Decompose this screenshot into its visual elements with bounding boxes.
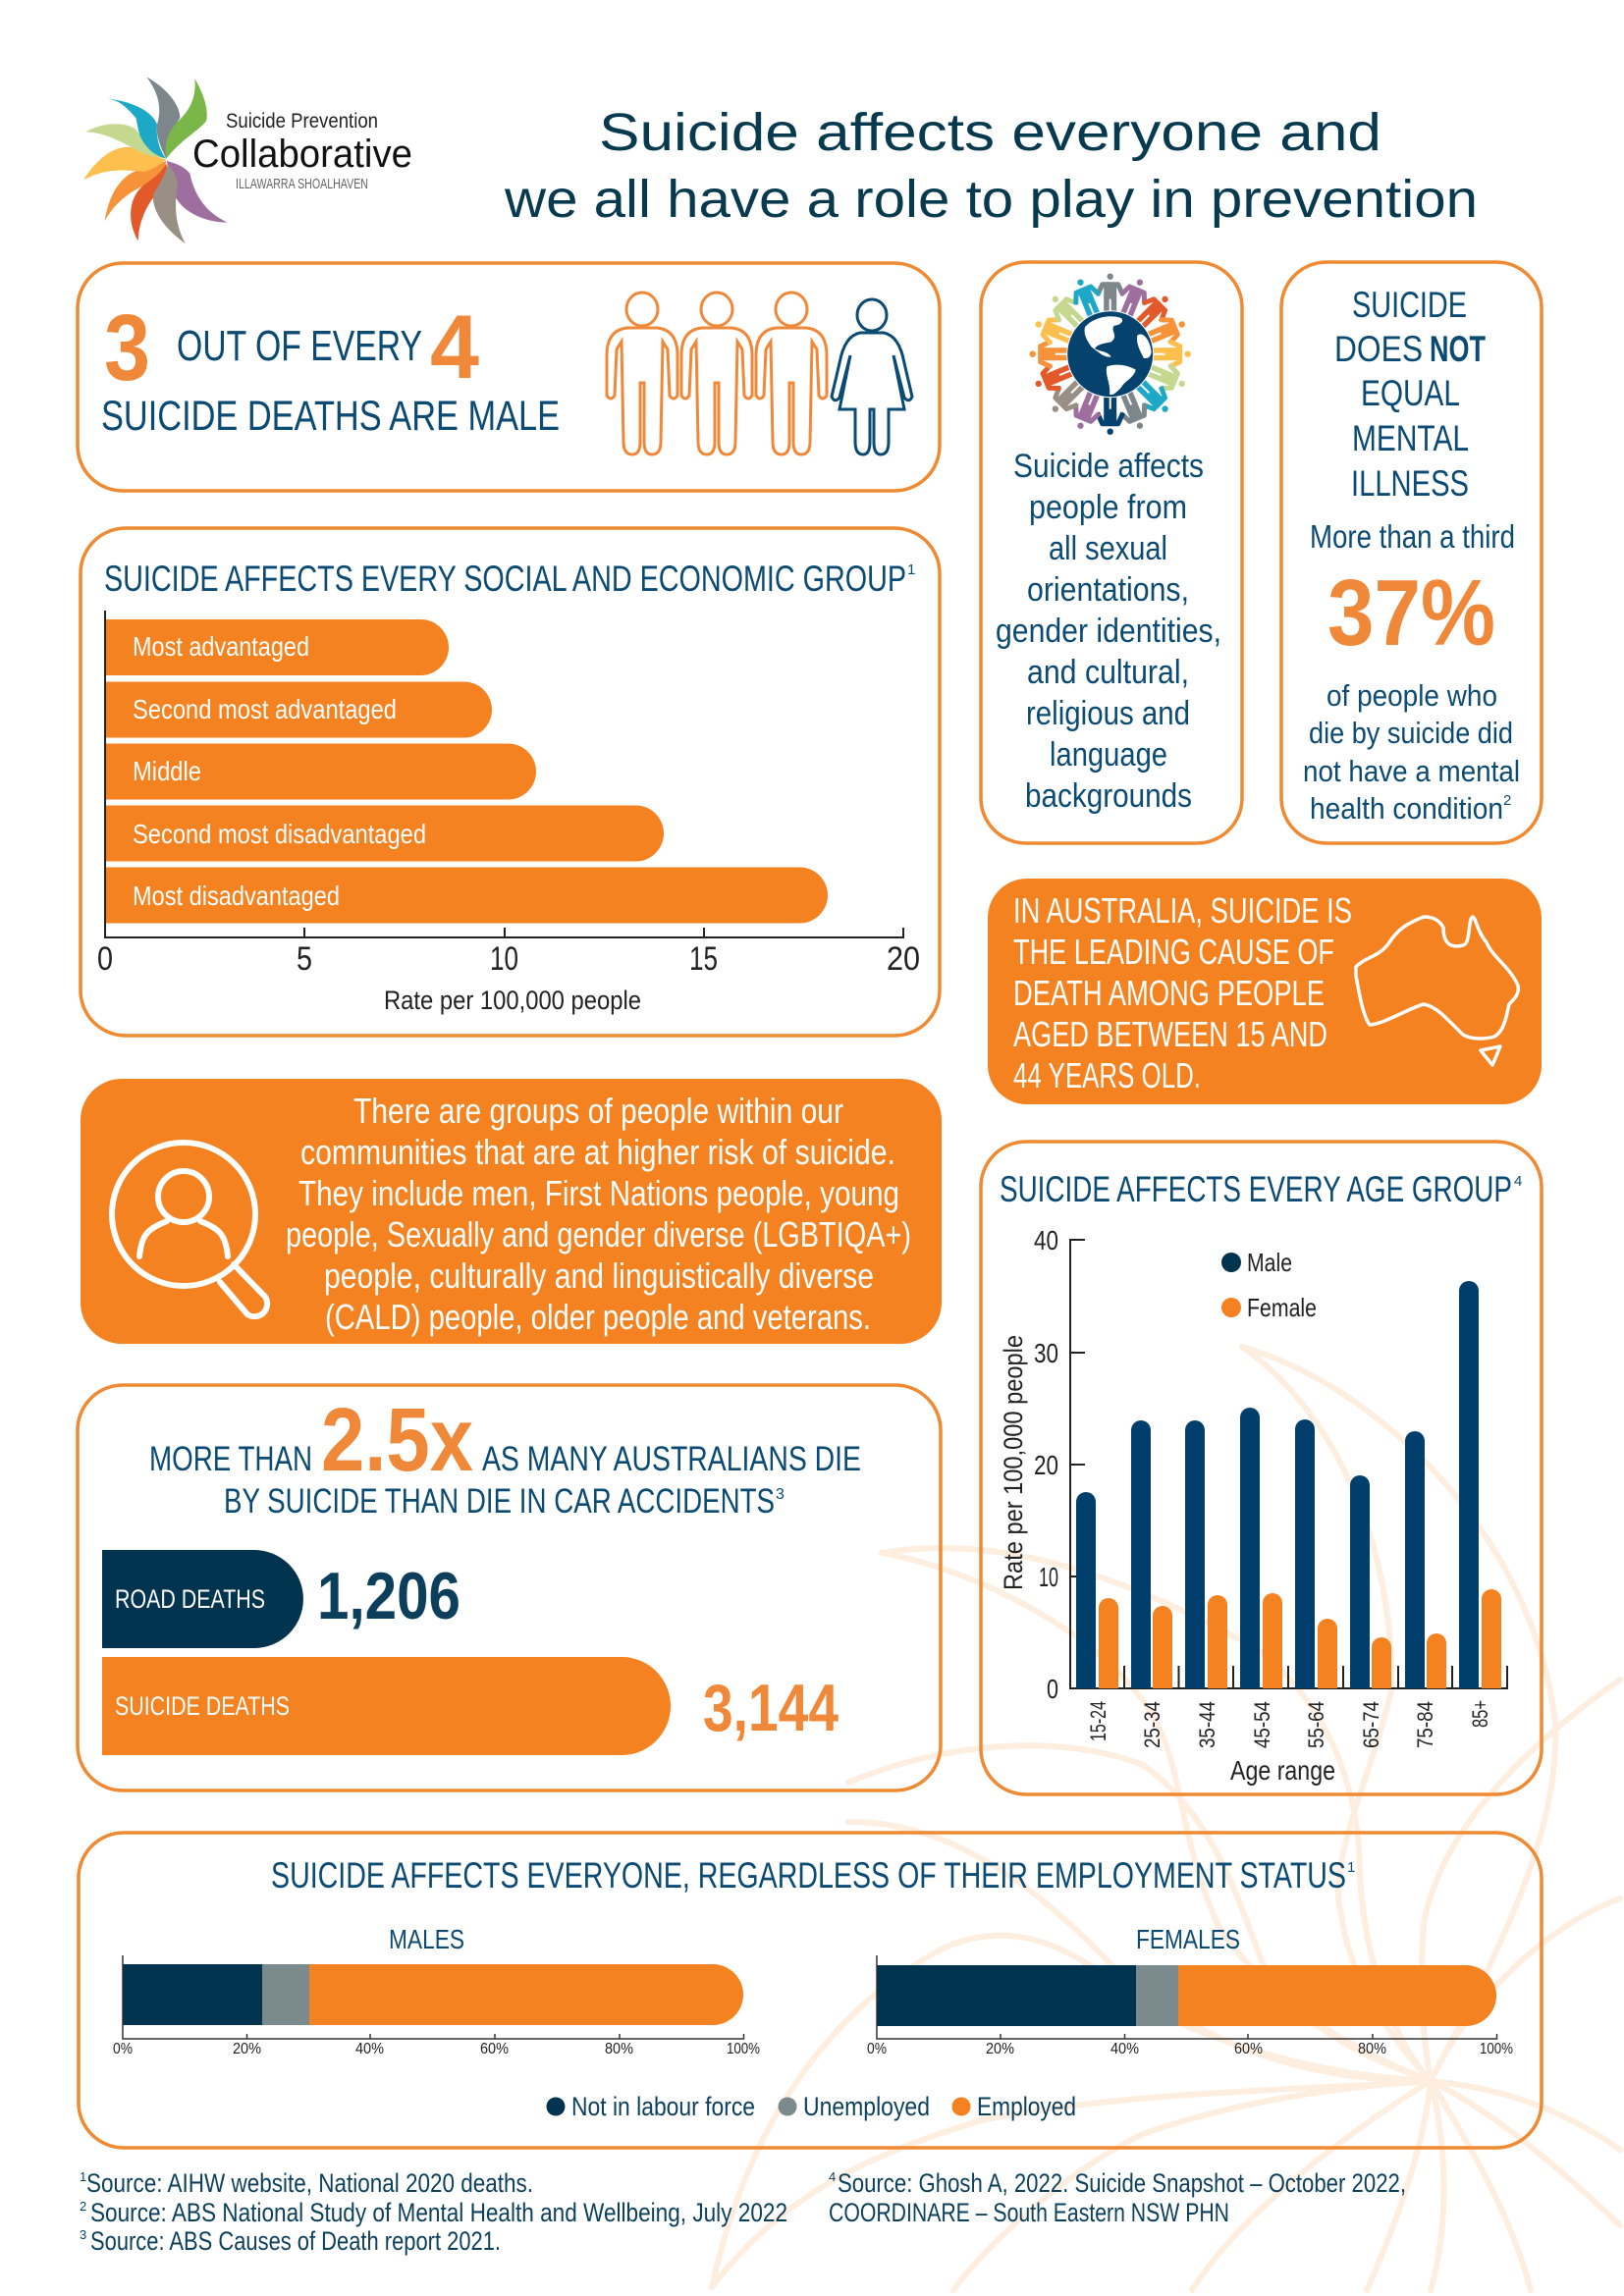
stat heading: OUT OF EVERY [177,322,422,370]
bar: second most disadvantaged: Second most disadvantaged [133,819,426,849]
chart legend: Male [1247,1248,1292,1277]
chart: females: 0% [867,2041,887,2057]
communities text: backgrounds [1025,777,1192,815]
footnotes: Source: Ghosh A, 2022. Suicide Snapshot – October 2022, [838,2168,1406,2198]
chart legend [1221,1248,1317,1322]
logo [83,77,412,243]
chart axes: Rate per 100,000 people [999,1335,1028,1590]
risk groups text [286,1091,911,1337]
panel: socio-economic group bar chart [81,528,940,1036]
icon: map of Australia [1356,917,1518,1065]
chart axis: 10 [490,940,518,978]
chart axes: 0 [1047,1674,1058,1704]
chart legend [546,2092,1076,2121]
footnotes: 2 [80,2199,86,2214]
leading cause text: 44 YEARS OLD. [1013,1055,1201,1095]
bar: second most advantaged [105,681,492,738]
panel heading: DOES [1334,329,1423,369]
stat: 37 percent: 37% [1327,561,1495,666]
leading cause text: DEATH AMONG PEOPLE [1013,973,1325,1013]
chart axes: 55-64 [1304,1701,1328,1748]
leading cause text: AGED BETWEEN 15 AND [1013,1014,1327,1054]
footnotes: 4 [829,2169,836,2184]
bar: middle: Middle [133,756,201,786]
chart axes: 65-74 [1359,1701,1383,1748]
comparison heading: AS MANY AUSTRALIANS DIE [482,1440,861,1478]
communities text: all sexual [1049,530,1167,567]
panel heading: MENTAL [1352,418,1469,458]
chart axes [999,1225,1507,1786]
chart axes: 85+ [1468,1700,1492,1728]
stat: 37 percent [1303,518,1520,826]
footnotes: COORDINARE – South Eastern NSW PHN [829,2198,1229,2227]
title [504,103,1478,229]
risk groups text: communities that are at higher risk of suicide. [300,1132,895,1172]
chart axis: 5 [297,940,312,978]
leading cause text: THE LEADING CAUSE OF [1013,932,1334,972]
communities text: people from [1029,489,1187,526]
chart legend: Unemployed [803,2092,930,2121]
chart axis [97,611,920,1015]
communities text: language [1050,736,1167,774]
logo text: Suicide Prevention [226,110,378,133]
chart legend: Not in labour force [571,2092,755,2121]
male bars [1076,1281,1479,1688]
chart axes: 35-44 [1195,1701,1219,1748]
chart axes: 40 [1034,1225,1058,1255]
panel heading: SUICIDE [1352,285,1467,325]
bar: second most advantaged: Second most advantaged [133,694,397,724]
logo text [192,110,412,192]
footnotes: 3 [80,2227,86,2242]
chart: males: 80% [605,2041,633,2057]
panel heading [1334,285,1486,504]
bar: most disadvantaged: Most disadvantaged [133,881,340,911]
female bars [1099,1589,1501,1688]
panel: road vs suicide deaths [78,1385,941,1790]
panel heading: 1 [1347,1859,1355,1876]
footnotes: Source: AIHW website, National 2020 deaths. [86,2168,533,2198]
panel heading: SUICIDE AFFECTS EVERYONE, REGARDLESS OF THEIR EMPLOYMENT STATUS [271,1855,1346,1896]
chart axes: Age range [1230,1755,1335,1786]
chart: males: MALES [389,1924,464,1954]
communities text: Suicide affects [1013,448,1204,485]
stat heading [101,295,560,440]
panel: higher risk groups [81,1079,942,1344]
title: Suicide affects everyone and [599,103,1381,162]
bar: most advantaged [105,619,449,675]
bar: most disadvantaged [105,868,828,923]
bar: suicide deaths: SUICIDE DEATHS [115,1691,290,1721]
panel heading: EQUAL [1361,373,1460,413]
comparison heading: 3 [776,1486,785,1503]
panel: age group chart [981,1142,1542,1794]
chart: males: 0% [113,2041,133,2057]
chart: females [867,1924,1513,2057]
chart axis: 15 [689,940,718,978]
chart heading: 4 [1514,1173,1522,1190]
communities text: religious and [1026,695,1190,732]
comparison heading [149,1390,861,1521]
icon: female figure [832,299,912,454]
chart: males: 100% [727,2041,760,2057]
chart heading: SUICIDE AFFECTS EVERY SOCIAL AND ECONOMIC GROUP [104,559,906,599]
stat: 37 percent: die by suicide did [1309,716,1513,750]
panel: suicide does not equal mental illness [1281,262,1542,843]
stat: 37 percent: health condition [1310,791,1503,826]
comparison heading: BY SUICIDE THAN DIE IN CAR ACCIDENTS [224,1482,775,1521]
panel: 3 out of every 4 [78,263,940,491]
icon: globe with ring of people [1029,273,1191,435]
communities text [996,448,1221,815]
bar: road deaths [102,1550,460,1648]
footnotes: 1 [80,2169,86,2184]
bar: most advantaged: Most advantaged [133,631,309,662]
chart axes: 45-54 [1250,1701,1274,1748]
risk groups text: They include men, First Nations people, young [298,1173,899,1213]
bar: road deaths: 1,206 [317,1559,460,1633]
panel heading: ILLNESS [1351,463,1469,504]
comparison heading: MORE THAN [149,1440,312,1478]
risk groups text: There are groups of people within our [353,1091,843,1131]
chart: males: 20% [233,2041,261,2057]
chart axis: 0 [97,940,113,978]
stat: 37 percent: of people who [1326,678,1497,713]
footnotes [80,2168,1406,2256]
risk groups text: people, Sexually and gender diverse (LGBTIQA+) [286,1214,911,1255]
stat: 37 percent: 2 [1503,792,1511,809]
chart: females: 100% [1480,2041,1513,2057]
bar: middle [105,744,536,799]
chart: males: 40% [355,2041,384,2057]
chart axes: 20 [1034,1450,1058,1480]
comparison heading: 2.5x [321,1390,473,1490]
chart axis: 20 [887,940,920,978]
chart axes: 30 [1034,1338,1058,1368]
logo text: ILLAWARRA SHOALHAVEN [236,176,368,192]
chart: males [113,1924,760,2057]
chart: females: 80% [1358,2041,1386,2057]
chart legend: Female [1247,1293,1317,1322]
chart: females: 60% [1234,2041,1263,2057]
panel: leading cause of death [988,879,1542,1104]
communities text: orientations, [1027,571,1189,609]
leading cause text [1013,890,1352,1095]
chart: females: 20% [986,2041,1014,2057]
leading cause text: IN AUSTRALIA, SUICIDE IS [1013,890,1352,931]
chart axes: 15-24 [1086,1701,1110,1741]
icon: logo petals [83,77,228,243]
chart: females: FEMALES [1136,1924,1240,1954]
chart legend: Employed [977,2092,1076,2121]
bar: suicide deaths [102,1657,839,1755]
communities text: and cultural, [1027,654,1189,691]
communities text: gender identities, [996,613,1221,650]
icon: magnifying glass with person [112,1143,267,1316]
bar: second most disadvantaged [105,805,664,862]
stat: 37 percent: More than a third [1310,518,1515,555]
panel: employment status [79,1833,1542,2148]
panel: all communities [981,262,1242,843]
chart axis: Rate per 100,000 people [384,986,641,1015]
icon: male figures [607,293,827,454]
footnotes: Source: ABS Causes of Death report 2021. [90,2226,501,2256]
chart axes: 25-34 [1140,1701,1164,1748]
title: we all have a role to play in prevention [504,170,1478,229]
footnotes: Source: ABS National Study of Mental Health and Wellbeing, July 2022 [90,2198,787,2227]
chart heading: 1 [907,561,915,578]
stat heading: 4 [430,297,479,398]
logo text: Collaborative [192,133,412,176]
chart axes: 75-84 [1413,1701,1437,1748]
chart axes: 10 [1039,1562,1058,1592]
stat heading: SUICIDE DEATHS ARE MALE [101,393,560,440]
panel heading: NOT [1430,329,1486,369]
chart: males: 60% [480,2041,509,2057]
chart: females: 40% [1110,2041,1139,2057]
stat heading: 3 [104,295,150,400]
bar: road deaths: ROAD DEATHS [115,1584,265,1614]
risk groups text: (CALD) people, older people and veterans. [325,1297,871,1337]
stat: 37 percent: not have a mental [1303,754,1520,788]
bar: suicide deaths: 3,144 [703,1671,839,1745]
background flower watermark [712,1347,1620,2290]
risk groups text: people, culturally and linguistically diverse [324,1255,874,1296]
